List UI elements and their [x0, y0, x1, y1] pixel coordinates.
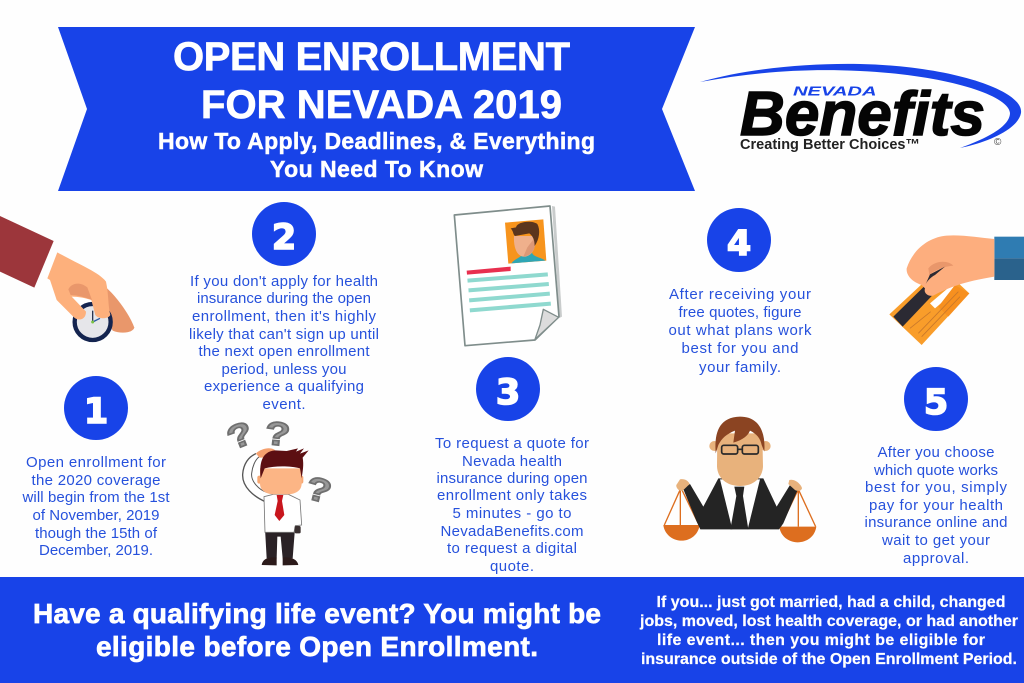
- bottom banner details: insurance outside of the Open Enrollment Period.: [641, 651, 1017, 668]
- icon: resume document: [454, 206, 562, 346]
- step 3 text: to request a digital: [447, 540, 577, 557]
- step 5 text: which quote works: [873, 462, 998, 479]
- question marks: ?: [302, 469, 335, 511]
- step 3 text: Nevada health: [462, 453, 562, 470]
- title banner: [58, 27, 695, 191]
- photo: [505, 219, 546, 264]
- bottom banner heading: Have a qualifying life event? You might be: [33, 598, 601, 629]
- bottom banner details: jobs, moved, lost health coverage, or had another: [639, 613, 1018, 630]
- step 3 text: enrollment only takes: [437, 487, 587, 504]
- step 5: [864, 367, 1008, 567]
- bottom banner details: If you... just got married, had a child, changed: [656, 594, 1006, 611]
- logo tagline: Creating Better Choices™: [740, 137, 920, 153]
- step 2 text: enrollment, then it's highly: [192, 308, 376, 325]
- bottom banner heading: [33, 598, 601, 662]
- question marks: ?: [263, 415, 292, 453]
- step 2 text: If you don't apply for health: [190, 273, 378, 290]
- logo word: Benefits: Benefits: [740, 80, 985, 149]
- bottom banner details: life event... then you might be eligible for: [657, 632, 985, 649]
- step 1 text: December, 2019.: [39, 542, 153, 559]
- step 4: [668, 208, 812, 376]
- step 3 text: [435, 435, 589, 575]
- logo swoosh: [700, 64, 1021, 148]
- scale cords: [664, 489, 816, 527]
- number badge 5: 5: [924, 383, 948, 423]
- step 3 text: NevadaBenefits.com: [440, 523, 584, 540]
- step 2 text: event.: [262, 396, 306, 413]
- step 5 text: After you choose: [878, 444, 994, 461]
- title subheading: You Need To Know: [270, 156, 483, 182]
- number badge 5: [904, 367, 968, 431]
- step 4 text: [668, 286, 812, 376]
- icon: hand holding credit card: [889, 235, 1024, 345]
- number badge 1: 1: [84, 392, 108, 432]
- logo copyright mark: ©: [994, 137, 1002, 148]
- logo word: Nevada: NEVADA: [793, 84, 877, 99]
- step 3 text: insurance during open: [436, 470, 588, 487]
- step 1 text: will begin from the 1st: [22, 489, 170, 506]
- icon: man in suit holding scales: [663, 417, 816, 542]
- number badge 4: [707, 208, 771, 272]
- step 4 text: free quotes, figure: [678, 304, 802, 321]
- step 1 text: of November, 2019: [32, 507, 160, 524]
- step 1 text: [22, 454, 170, 559]
- step 5 text: pay for your health: [869, 497, 1003, 514]
- title heading: [173, 35, 570, 127]
- number badge 2: 2: [272, 218, 296, 258]
- step 2 text: [189, 273, 379, 413]
- question marks: [222, 414, 335, 511]
- icon: hand holding stopwatch: [0, 216, 134, 340]
- title heading: OPEN ENROLLMENT: [173, 35, 570, 79]
- number badge 3: [476, 357, 540, 421]
- number badge 2: [252, 202, 316, 266]
- step 4 text: After receiving your: [669, 286, 811, 303]
- step 1 text: though the 15th of: [35, 525, 158, 542]
- step 5 text: wait to get your: [881, 532, 990, 549]
- glasses: [722, 445, 758, 454]
- step 2 text: likely that can't sign up until: [189, 326, 379, 343]
- step 2 text: the next open enrollment: [198, 343, 370, 360]
- icon: confused man with question marks: [222, 414, 335, 565]
- step 3 text: 5 minutes - go to: [452, 505, 572, 522]
- bottom banner details: [639, 594, 1018, 668]
- step 5 text: insurance online and: [864, 514, 1008, 531]
- question marks: ?: [222, 414, 258, 457]
- step 3: [435, 357, 589, 575]
- step 1 text: the 2020 coverage: [32, 472, 160, 489]
- title subheading: How To Apply, Deadlines, & Everything: [158, 128, 595, 154]
- step 3 text: To request a quote for: [435, 435, 589, 452]
- step 1 text: Open enrollment for: [26, 454, 166, 471]
- step 3 text: quote.: [490, 558, 534, 575]
- number badge 1: [64, 376, 128, 440]
- step 2: [189, 202, 379, 413]
- step 5 text: [864, 444, 1008, 567]
- step 2 text: experience a qualifying: [204, 378, 364, 395]
- step 1: [22, 376, 170, 559]
- step 4 text: best for you and: [682, 340, 798, 357]
- step 2 text: period, unless you: [222, 361, 346, 378]
- logo: Nevada Benefits: [700, 64, 1021, 153]
- number badge 3: 3: [496, 373, 520, 413]
- number badge 4: 4: [727, 224, 751, 264]
- step 4 text: out what plans work: [668, 322, 812, 339]
- step 4 text: your family.: [699, 359, 781, 376]
- step 5 text: approval.: [903, 550, 969, 567]
- bottom banner: [0, 577, 1024, 683]
- title subheading: [158, 128, 595, 182]
- title heading: FOR NEVADA 2019: [201, 83, 562, 127]
- step 5 text: best for you, simply: [865, 479, 1008, 496]
- step 2 text: insurance during the open: [197, 290, 371, 307]
- bottom banner heading: eligible before Open Enrollment.: [96, 631, 538, 662]
